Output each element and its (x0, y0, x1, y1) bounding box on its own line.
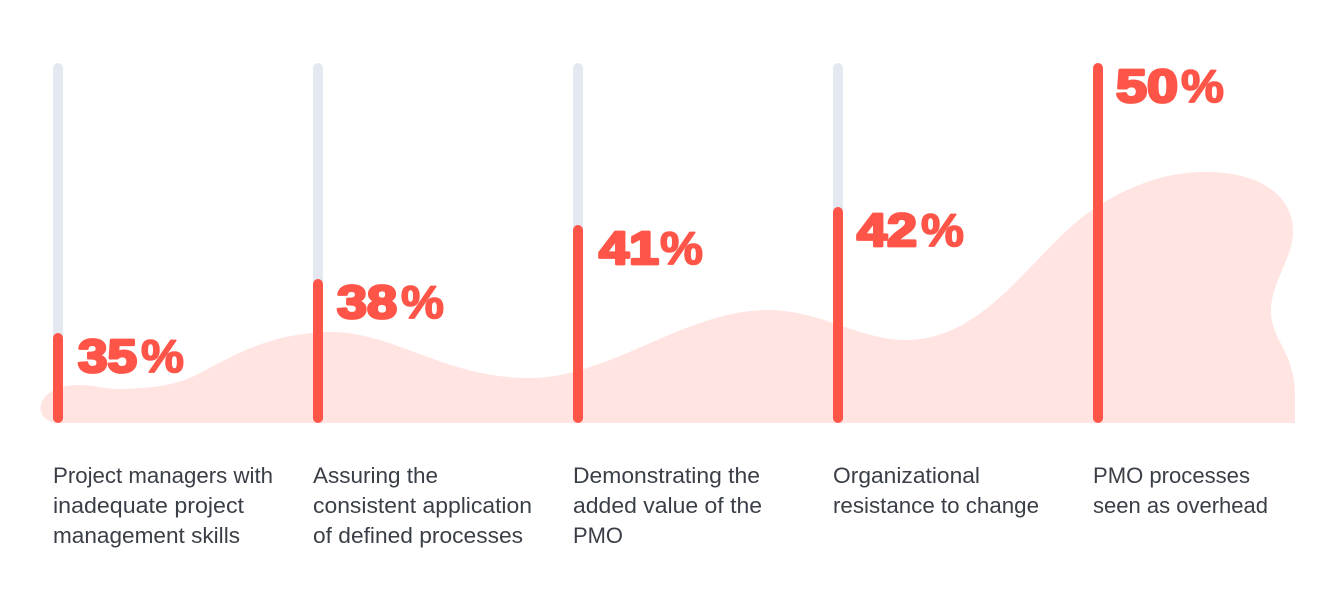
background wave area (41, 172, 1295, 423)
track 1 (53, 63, 63, 423)
bar 1 (53, 333, 63, 423)
label 2: Assuring the (313, 463, 438, 488)
value 50%: 50 (1116, 60, 1178, 112)
value 38%: 38 (337, 276, 397, 328)
track 3 (573, 63, 583, 423)
track 2 (313, 63, 323, 423)
label 3: Demonstrating the (573, 463, 760, 488)
label 5: seen as overhead (1093, 493, 1268, 518)
track 4 (833, 63, 843, 423)
label 4: Organizational (833, 463, 980, 488)
value 50%: % (1181, 60, 1224, 112)
column 5: 50% (1093, 60, 1268, 518)
value 38%: % (401, 276, 444, 328)
value 42%: 42 (857, 204, 917, 256)
label 3: added value of the (573, 493, 762, 518)
column 2: 38% (313, 63, 532, 548)
label 3: PMO (573, 523, 623, 548)
label 2: consistent application (313, 493, 532, 518)
label 1: management skills (53, 523, 240, 548)
value 42%: % (921, 204, 964, 256)
bar 5 (1093, 63, 1103, 423)
value 35%: 35 (78, 330, 137, 382)
value 41%: 41 (599, 222, 659, 274)
label 1: inadequate project (53, 493, 244, 518)
label 5: PMO processes (1093, 463, 1250, 488)
column 3: 41% (573, 63, 762, 548)
label 1: Project managers with (53, 463, 273, 488)
column 4: 42% (833, 63, 1039, 518)
bar 4 (833, 207, 843, 423)
bar 3 (573, 225, 583, 423)
label 2: of defined processes (313, 523, 523, 548)
value 35%: % (141, 330, 184, 382)
label 4: resistance to change (833, 493, 1039, 518)
value 41%: % (660, 222, 703, 274)
bar 2 (313, 279, 323, 423)
column 1: 35% (53, 63, 273, 548)
